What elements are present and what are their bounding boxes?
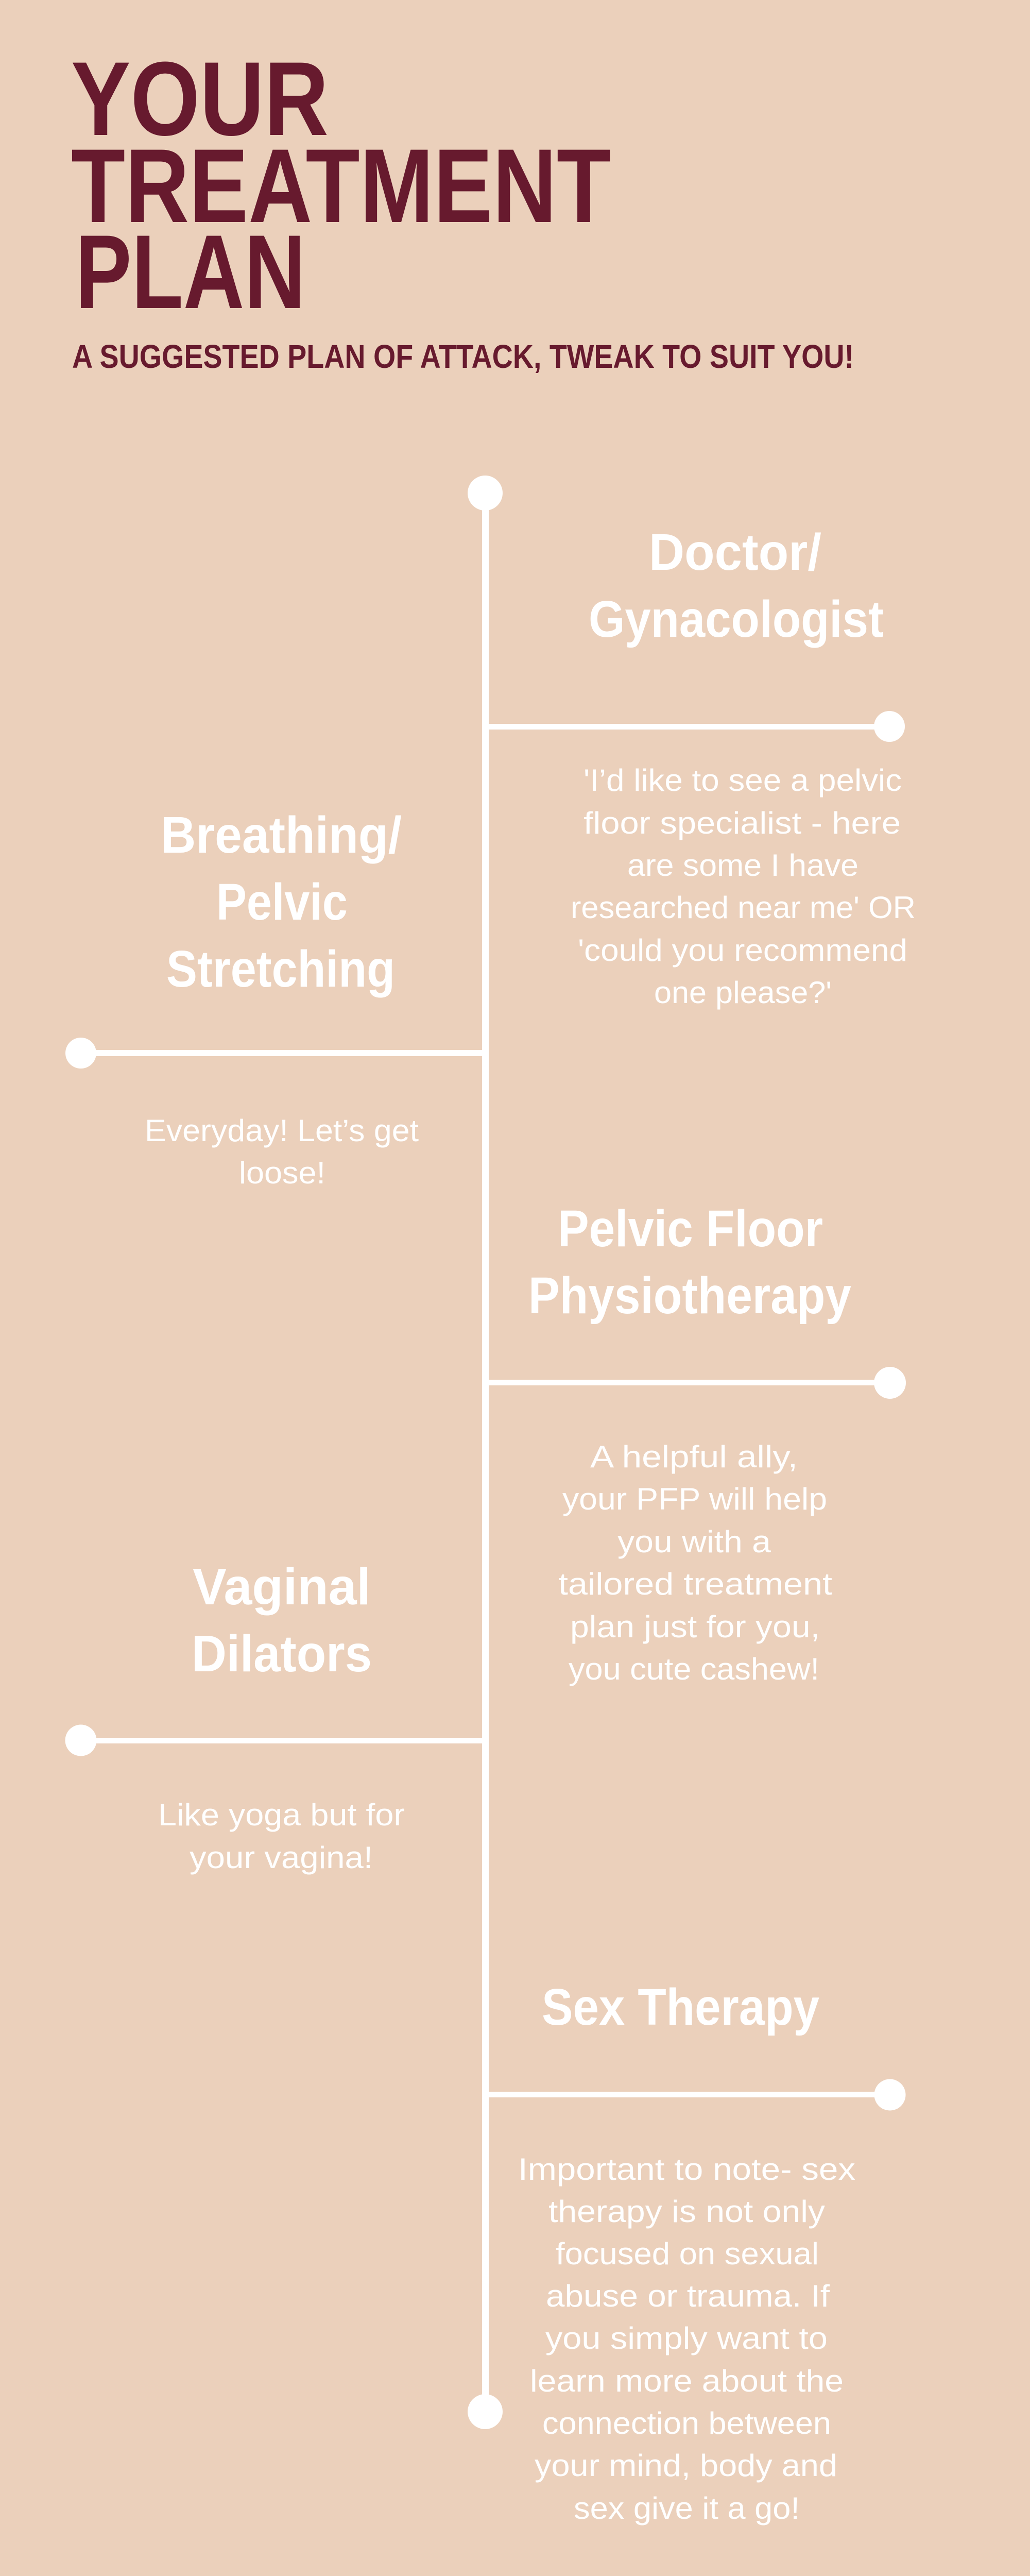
heading: pelvic floor physiotherapy: Pelvic Floor bbox=[558, 1200, 823, 1258]
description: sex therapy: Important to note- sex bbox=[518, 2152, 855, 2187]
panel: vaginal dilators bbox=[65, 1558, 482, 1875]
heading: doctor / gynacologist: Gynacologist bbox=[589, 590, 884, 648]
heading: breathing / pelvic stretching: Pelvic bbox=[216, 873, 348, 931]
description: breathing: Everyday! Let’s get bbox=[145, 1113, 419, 1148]
panel: sex therapy bbox=[489, 1978, 905, 2526]
description: sex therapy: therapy is not only bbox=[548, 2194, 825, 2229]
description: doctor bbox=[571, 763, 916, 1010]
title: PLAN bbox=[75, 213, 305, 331]
description: sex therapy: abuse or trauma. If bbox=[546, 2279, 830, 2313]
description: doctor: are some I have bbox=[627, 848, 859, 883]
panel: breathing / pelvic stretching bbox=[65, 806, 482, 1190]
heading: breathing / pelvic stretching: Breathing/ bbox=[161, 806, 402, 864]
description: vaginal dilators: Like yoga but for bbox=[158, 1798, 405, 1832]
connector and dot bbox=[489, 711, 905, 742]
description: sex therapy: your mind, body and bbox=[535, 2448, 837, 2483]
panel: pelvic floor physiotherapy bbox=[489, 1200, 906, 1686]
heading: doctor / gynacologist bbox=[589, 523, 884, 648]
title: TREATMENT bbox=[71, 127, 611, 245]
panel: doctor / gynacologist bbox=[489, 523, 916, 1010]
description: physiotherapy: you cute cashew! bbox=[569, 1652, 819, 1686]
description: vaginal dilators: your vagina! bbox=[190, 1840, 373, 1875]
subtitle: A SUGGESTED PLAN OF ATTACK, TWEAK TO SUIT YOU! bbox=[72, 338, 854, 375]
heading: vaginal dilators: Dilators bbox=[192, 1625, 372, 1683]
heading: pelvic floor physiotherapy bbox=[528, 1200, 851, 1325]
heading: vaginal dilators: Vaginal bbox=[193, 1558, 371, 1616]
description: breathing: loose! bbox=[239, 1156, 325, 1190]
description: sex therapy: focused on sexual bbox=[556, 2236, 819, 2271]
description: vaginal dilators bbox=[158, 1798, 405, 1875]
description: doctor: researched near me' OR bbox=[571, 890, 916, 925]
description: breathing bbox=[145, 1113, 419, 1190]
description: sex therapy: you simply want to bbox=[545, 2321, 828, 2355]
description: doctor: 'could you recommend bbox=[578, 933, 907, 968]
heading: breathing / pelvic stretching: Stretching bbox=[166, 940, 395, 998]
connector and dot bbox=[65, 1038, 482, 1069]
title: YOUR bbox=[71, 40, 329, 158]
description: sex therapy bbox=[518, 2152, 855, 2526]
description: physiotherapy: you with a bbox=[617, 1524, 771, 1559]
connector and dot bbox=[489, 1367, 906, 1399]
description: doctor: floor specialist - here bbox=[583, 806, 901, 840]
title bbox=[71, 40, 611, 331]
description: physiotherapy: A helpful ally, bbox=[590, 1439, 798, 1474]
description: physiotherapy: tailored treatment bbox=[558, 1567, 832, 1601]
description: doctor: one please?' bbox=[654, 975, 832, 1010]
description: physiotherapy bbox=[558, 1439, 832, 1686]
connector and dot bbox=[65, 1725, 482, 1756]
connector and dot bbox=[489, 2079, 905, 2110]
heading: pelvic floor physiotherapy: Physiotherapy bbox=[528, 1267, 851, 1325]
description: physiotherapy: your PFP will help bbox=[562, 1482, 827, 1516]
description: doctor: 'I’d like to see a pelvic bbox=[583, 763, 902, 798]
description: sex therapy: sex give it a go! bbox=[574, 2491, 800, 2526]
heading: sex therapy: Sex Therapy bbox=[542, 1978, 819, 2036]
heading: vaginal dilators bbox=[192, 1558, 372, 1683]
description: sex therapy: connection between bbox=[542, 2406, 831, 2441]
description: physiotherapy: plan just for you, bbox=[570, 1609, 820, 1644]
timeline spine with end dots bbox=[468, 476, 503, 2429]
heading: doctor / gynacologist: Doctor/ bbox=[649, 523, 821, 581]
heading: breathing / pelvic stretching bbox=[161, 806, 402, 998]
description: sex therapy: learn more about the bbox=[530, 2364, 844, 2398]
